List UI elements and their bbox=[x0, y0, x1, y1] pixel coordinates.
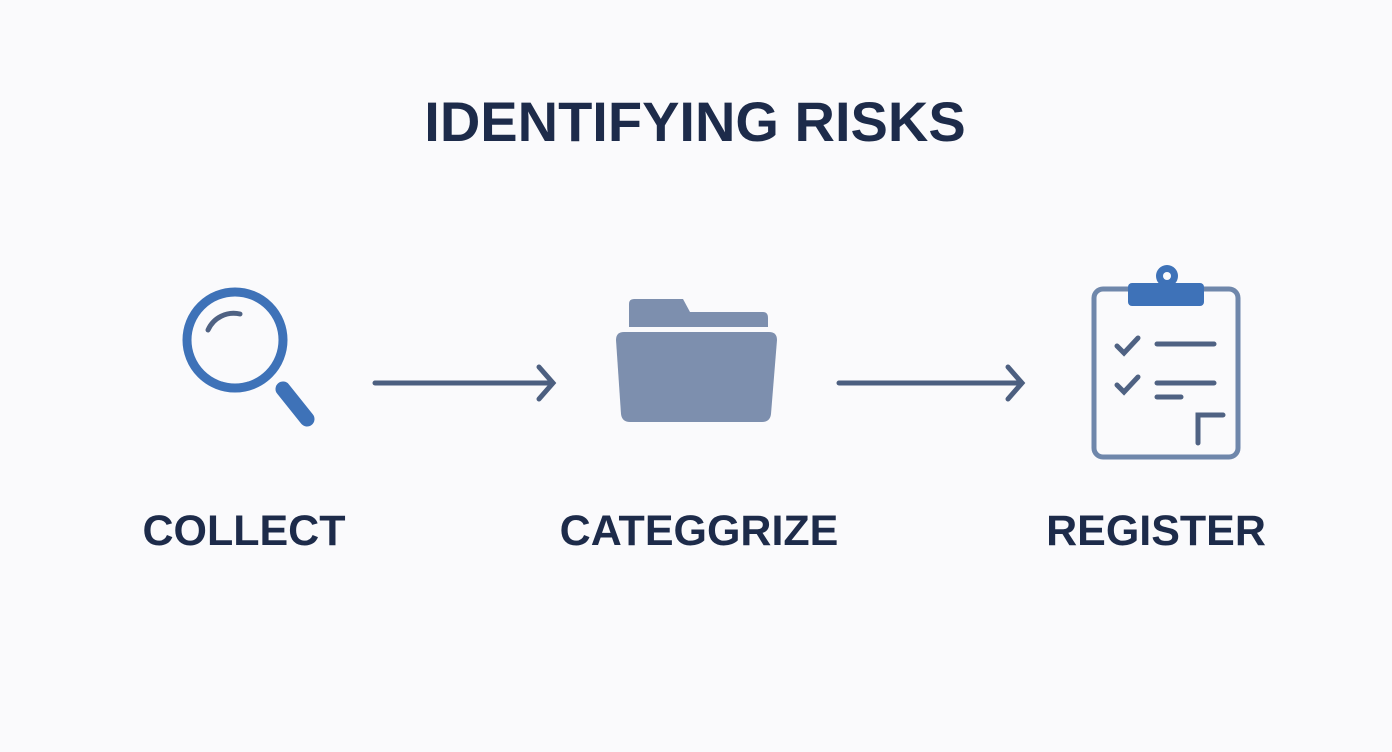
label: categorize: CATEGGRIZE bbox=[560, 507, 838, 555]
label: register: REGISTER bbox=[1046, 507, 1266, 555]
icon: magnifier bbox=[187, 292, 307, 419]
title: IDENTIFYING RISKS bbox=[424, 90, 966, 153]
arrow 1 bbox=[375, 367, 553, 399]
label: collect: COLLECT bbox=[142, 507, 346, 555]
icon: folder bbox=[616, 299, 777, 422]
arrow 2 bbox=[839, 367, 1022, 399]
icon: clipboard bbox=[1094, 265, 1238, 457]
